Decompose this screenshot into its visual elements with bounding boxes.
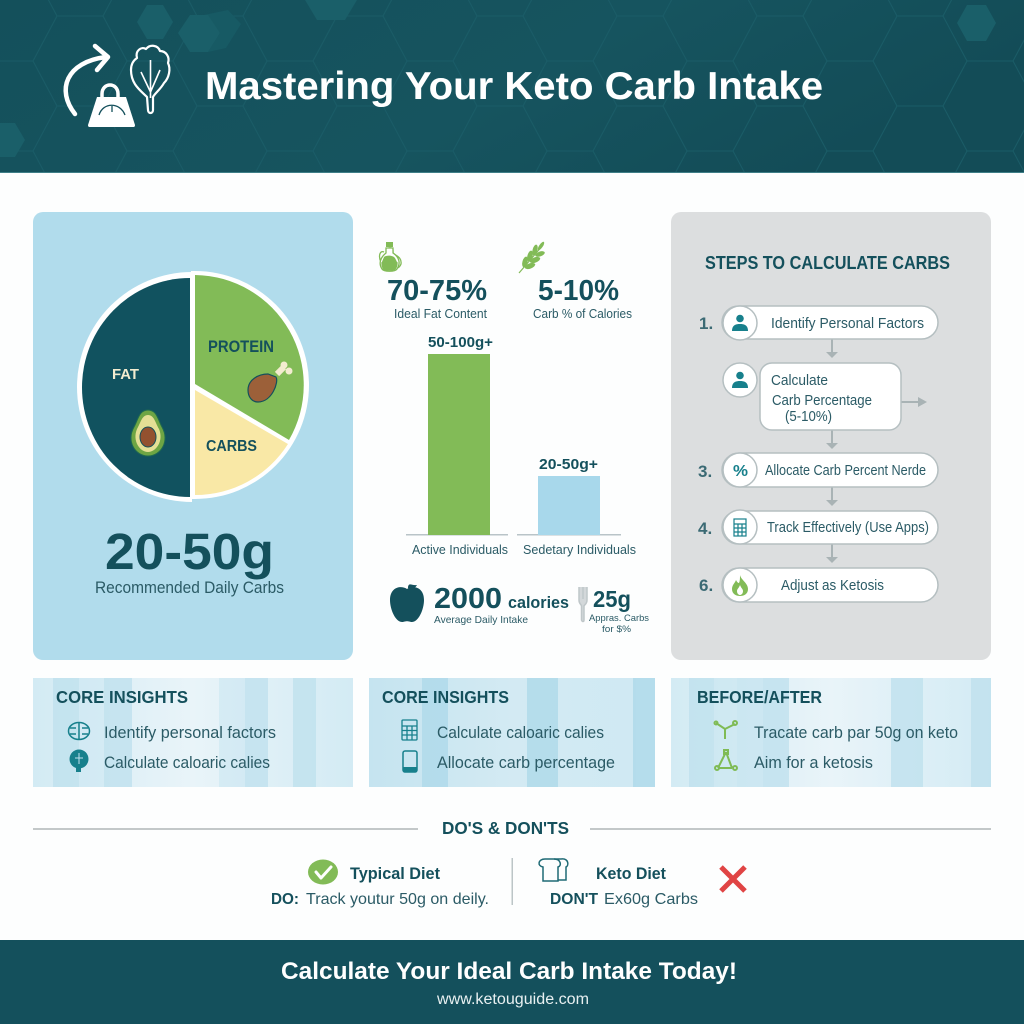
stat: approx carbs: for $% [602,624,632,635]
header banner [0,0,1024,173]
label: fat: FAT [112,366,139,383]
stat: approx carbs [589,586,649,635]
call to action: Calculate Your Ideal Carb Intake Today! [281,958,737,985]
step 3 [698,453,938,487]
section: dos and donts [33,818,991,908]
value: sedentary: 20-50g+ [539,456,598,473]
bar: sedentary [538,476,600,535]
step 2 [723,363,901,430]
icon: head [70,750,88,772]
icon: brain [68,722,90,740]
step 3: 3. [698,462,712,481]
steps heading: STEPS TO CALCULATE CARBS [705,253,950,273]
text: Allocate carb percentage [437,754,615,772]
icon: apple [390,584,424,622]
label: protein: PROTEIN [208,337,274,356]
icon: wheat [519,241,546,273]
step 6: Adjust as Ketosis [781,577,884,594]
icon: oil bottle [380,242,401,271]
step 4: Track Effectively (Use Apps) [767,519,929,536]
dont text [550,891,698,908]
icon: molecule top [714,721,737,739]
text: Aim for a ketosis [754,754,873,772]
label: sedentary: Sedetary Individuals [523,543,636,557]
icon: phone [403,751,417,772]
bar: active [428,354,490,535]
caption: Recommended Daily Carbs [95,579,284,597]
step 6 [699,568,938,602]
step 2: Carb Percentage [772,392,872,409]
do text: Track youtur 50g on deily. [306,891,489,908]
icon: chicken drumstick [248,362,292,402]
label: active: Active Individuals [412,543,508,557]
heading: BEFORE/AFTER [697,687,822,707]
icon: molecule bottom [715,750,737,770]
panel: core insights 2 [369,678,655,787]
panel: before and after [671,678,991,787]
panel: macro pie [33,212,353,660]
step 3: Allocate Carb Percent Nerde [765,463,926,479]
stat: calories: 2000 [434,583,502,615]
icon: fork [579,587,587,622]
step 6: 6. [699,576,713,595]
step 1: Identify Personal Factors [771,315,924,332]
panel: core insights 1 [33,678,353,787]
text: Identify personal factors [104,724,276,742]
stat: carb percent [533,275,632,321]
step 4: 4. [698,519,712,538]
arrows [826,339,927,563]
heading: DO'S & DON'TS [442,818,569,838]
pie chart [77,271,309,502]
dont text: Ex60g Carbs [604,891,698,908]
icon: bread [539,859,568,881]
step 2: Calculate [771,372,828,389]
panel: steps [671,212,991,660]
heading: CORE INSIGHTS [382,687,509,707]
text: Calculate caloaric calies [437,724,604,742]
stat: approx carbs: 25g [593,586,631,612]
step 3: % [733,463,748,480]
label: carbs: CARBS [206,438,257,455]
heading: CORE INSIGHTS [56,687,188,707]
icon: avocado [131,410,165,456]
label: typical: Typical Diet [350,864,440,883]
stat: fat content: 70-75% [387,275,487,307]
stat: approx carbs: Appras. Carbs [589,613,649,624]
icon: calculator [402,720,417,740]
bar chart [406,334,636,557]
stat: calories: calories [508,594,569,612]
step 2: (5-10%) [785,408,832,425]
panel: stats and bars [380,241,649,635]
dont text: DON'T [550,891,598,908]
stat: calories [434,583,569,626]
url: www.ketouguide.com [436,991,589,1008]
stat: carb percent: 5-10% [538,275,619,307]
step 4 [698,510,938,544]
stat: calories: Average Daily Intake [434,614,528,626]
step 1: 1. [699,314,713,333]
footer banner [0,940,1024,1024]
do text: DO: [271,891,299,908]
big stat: 20-50g [105,523,274,580]
step 1 [699,306,938,340]
title: Mastering Your Keto Carb Intake [205,65,823,108]
icon: check [308,860,338,884]
stat: carb percent: Carb % of Calories [533,307,632,321]
text: Calculate caloaric calies [104,754,270,772]
icon: arrow, scale and leaf [66,46,169,127]
label: keto: Keto Diet [596,864,666,883]
value: active: 50-100g+ [428,334,493,351]
text: Tracate carb par 50g on keto [754,724,958,742]
stat: fat content: Ideal Fat Content [394,307,487,321]
icon: cross [721,867,745,891]
stat: fat content [387,275,487,321]
